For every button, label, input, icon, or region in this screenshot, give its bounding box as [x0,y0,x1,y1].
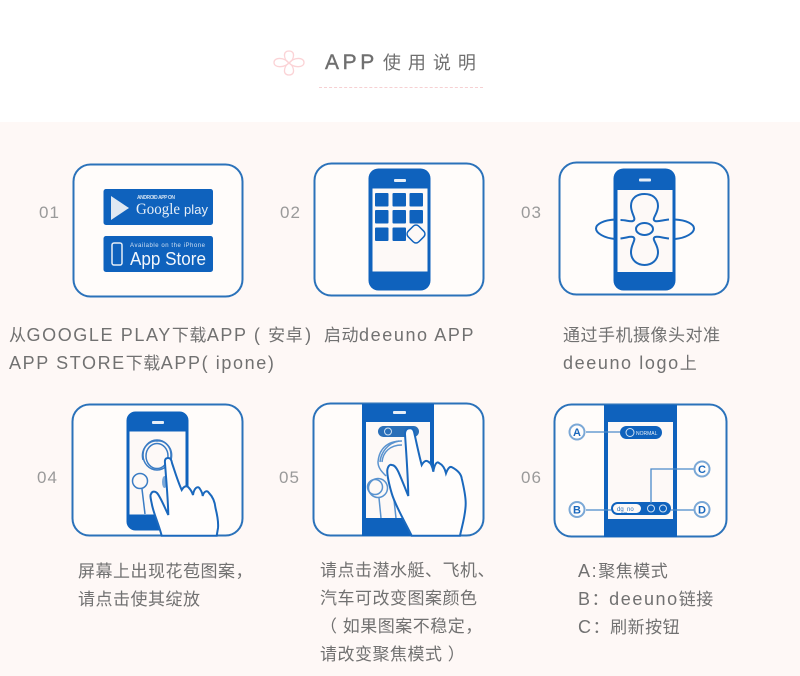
step number 04: 04 [37,468,58,487]
step 4 caption: 请点击使其绽放 [78,590,200,609]
step 5 caption: 请改变聚焦模式 ） [320,645,465,664]
step 5 caption [320,561,495,664]
step number 03: 03 [521,203,542,222]
panel 6: phone interface legend: NORMAL [636,431,658,437]
step 5 caption: 请点击潜水艇、飞机、 [320,561,495,580]
step 3 caption: deeuno logo上 [563,353,697,373]
panel 6: phone interface legend: dg_no [617,507,634,513]
step number 01: 01 [39,203,60,222]
title flower icon [273,50,305,76]
step number 05: 05 [279,468,300,487]
step 5 caption: 汽车可改变图案颜色 [320,589,478,608]
hand [387,428,466,536]
step number 06: 06 [521,468,542,487]
step 1 caption [9,325,313,373]
panel 1: store badges: Google [136,201,180,218]
step 6 caption [578,561,714,637]
step 6 caption: A:聚焦模式 [578,561,668,581]
step 1 caption: 从GOOGLE PLAY下载APP ( 安卓) [9,325,313,345]
panel 6: phone interface legend: C [698,464,706,476]
panel 1: store badges: ANDROID APP ON [137,195,175,201]
step 3 caption: 通过手机摄像头对准 [563,326,720,345]
panel 6: phone interface legend: D [698,504,706,516]
panel 1: store badges: play [184,202,208,217]
step 6 caption: C：刷新按钮 [578,617,680,637]
title underline [319,87,483,88]
title: APP 使用说明 [325,51,483,74]
step 3 caption [563,326,720,373]
step 6 caption: B：deeuno链接 [578,589,714,609]
step 5 caption: （ 如果图案不稳定， [320,617,483,636]
panel 6: phone interface legend: A [573,427,581,439]
panel 1: store badges: App Store [130,249,206,269]
step number 02: 02 [280,203,301,222]
hand [150,458,218,536]
step 4 caption [78,562,253,609]
step 1 caption: APP STORE下载APP( ipone) [9,353,275,373]
panel 1: store badges: Available on the iPhone [130,243,206,249]
step 2 caption: 启动deeuno APP [324,325,475,345]
step 4 caption: 屏幕上出现花苞图案， [78,562,253,581]
panel 6: phone interface legend: B [573,504,581,516]
